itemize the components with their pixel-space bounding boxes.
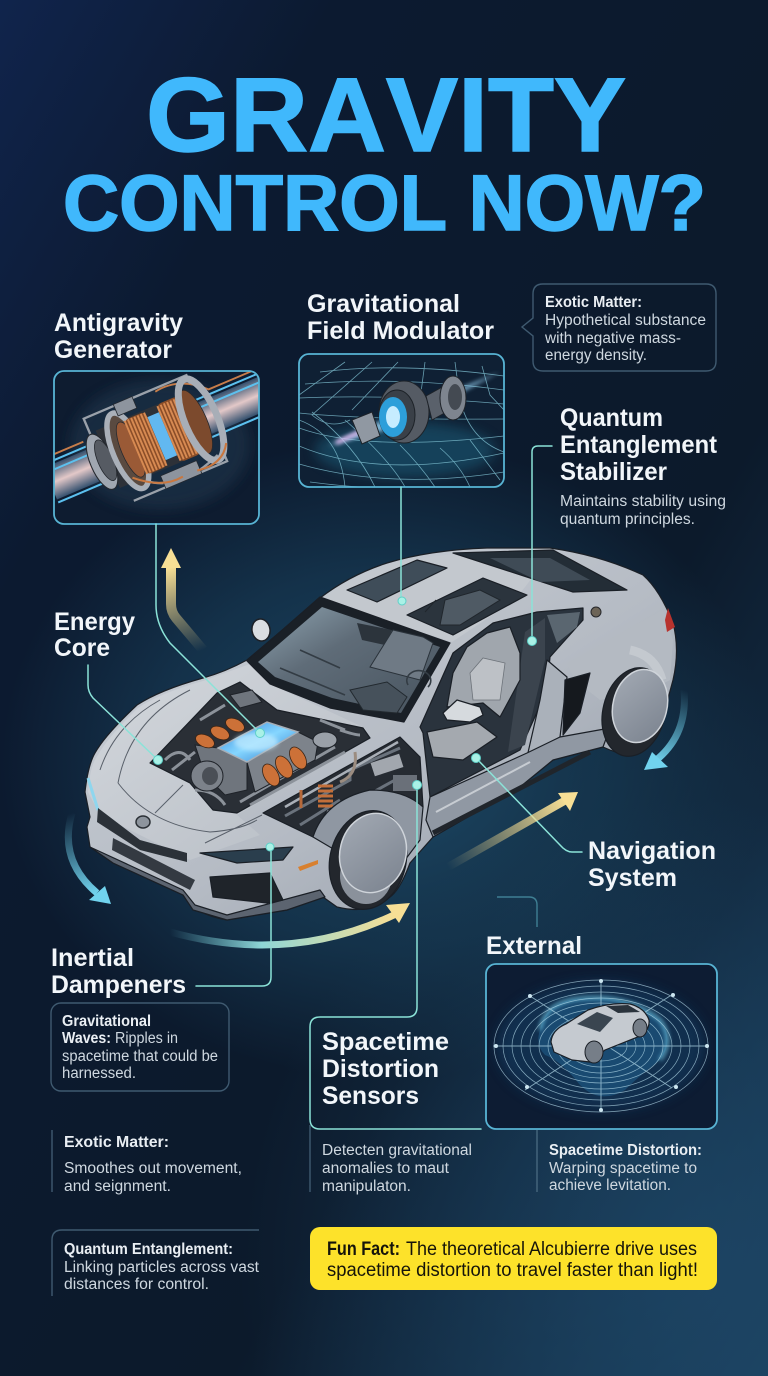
heading: navigation system: System xyxy=(588,864,677,892)
panel: spacetime distortion sensors: Detecten gravitational xyxy=(322,1142,472,1159)
heading: Gravitational Field Modulator: Gravitational xyxy=(307,290,460,318)
arrow: yellow diagonal xyxy=(448,792,578,867)
roof highlights xyxy=(322,552,545,642)
rear tyre xyxy=(593,661,675,763)
text block: quantum entanglement stabilizer: quantum principles. xyxy=(560,511,695,528)
text block: quantum entanglement stabilizer xyxy=(560,404,726,528)
panel: antigravity generator illustration xyxy=(53,370,260,525)
callout: fun fact: spacetime distortion to travel faster than light! xyxy=(327,1260,698,1281)
arrow: bottom sweep xyxy=(170,903,410,945)
side roof window xyxy=(407,578,527,635)
engine machinery xyxy=(165,705,360,805)
car illustration xyxy=(85,548,676,920)
mirror xyxy=(250,618,272,642)
warped grid xyxy=(299,362,504,489)
copper coils xyxy=(125,413,166,474)
arrow: cyan rotation left xyxy=(68,813,111,904)
callout: spacetime distortion note: achieve levitation. xyxy=(549,1177,671,1194)
callout: gravitational waves: spacetime that could be xyxy=(62,1048,218,1065)
chassis cut-away xyxy=(263,737,423,837)
door opening xyxy=(420,608,583,797)
callout: spacetime distortion note: Warping spacetime to xyxy=(549,1160,697,1177)
heading: energy core: Energy xyxy=(54,608,135,636)
front tyre xyxy=(319,802,417,918)
panel: spacetime distortion sensors: Spacetime xyxy=(322,1028,449,1056)
suspension spring xyxy=(318,786,333,806)
leader: external xyxy=(497,897,537,927)
callout: exotic matter definition: with negative mass- xyxy=(544,330,681,347)
arrow: cyan rotation right xyxy=(644,690,684,770)
tail light xyxy=(665,608,675,632)
front fender xyxy=(313,790,423,860)
heading: Gravitational Field Modulator: Field Modulator xyxy=(307,317,494,345)
heading: navigation system xyxy=(588,837,716,892)
seat back xyxy=(447,627,520,717)
text block: inertial dampeners heading: Inertial xyxy=(51,944,134,972)
callout: spacetime distortion note xyxy=(537,1130,702,1194)
callout: quantum entanglement note: distances for control. xyxy=(64,1276,209,1293)
callout: gravitational waves: harnessed. xyxy=(62,1065,136,1082)
title: GRAVITY xyxy=(146,57,626,174)
callout: quantum entanglement note: Linking particles across vast xyxy=(64,1259,260,1276)
heading: energy core xyxy=(54,608,135,662)
callout: fun fact: The theoretical Alcubierre drive uses xyxy=(406,1239,697,1260)
concentric rings xyxy=(493,980,709,1112)
front wheel disc xyxy=(331,806,415,900)
text block: quantum entanglement stabilizer: Quantum xyxy=(560,404,663,432)
leader: quantum stabilizer xyxy=(528,446,552,646)
lower intake xyxy=(210,873,283,903)
callout: exotic matter definition xyxy=(522,284,716,371)
title xyxy=(63,57,706,247)
rear quarter shading xyxy=(567,610,673,700)
badge xyxy=(136,816,150,828)
orange manifold coils xyxy=(193,715,310,789)
callout: exotic matter definition: Hypothetical substance xyxy=(545,312,706,329)
callout: gravitational waves: Gravitational xyxy=(62,1013,151,1030)
callout: quantum entanglement note xyxy=(52,1230,260,1296)
panel: spacetime distortion sensors: anomalies to maut xyxy=(322,1160,450,1177)
door inner panel xyxy=(527,660,567,757)
panel: spacetime distortion sensors: Sensors xyxy=(322,1082,419,1110)
energy beam xyxy=(328,372,500,446)
seat cushion xyxy=(427,722,497,760)
generator tube xyxy=(54,377,258,500)
rear wheel disc xyxy=(605,664,675,748)
leader: navigation xyxy=(472,754,582,852)
fuel cap xyxy=(591,607,601,617)
heading: energy core: Core xyxy=(54,634,110,662)
windshield xyxy=(247,597,450,722)
callout: gravitational waves: Waves: xyxy=(62,1030,111,1047)
text block: inertial dampeners heading xyxy=(51,944,186,999)
panel: spacetime distortion sensors: manipulaton. xyxy=(322,1178,411,1195)
marker lamp xyxy=(298,860,318,871)
title: CONTROL NOW? xyxy=(63,158,706,247)
front grille strip xyxy=(97,808,187,862)
callout: fun fact: Fun Fact: xyxy=(327,1239,400,1260)
callout: gravitational waves xyxy=(51,1003,229,1091)
callout: gravitational waves: Ripples in xyxy=(115,1030,178,1047)
panel: field modulator illustration xyxy=(299,354,504,489)
callout: exotic matter note: and seignment. xyxy=(64,1178,171,1195)
leader: antigravity generator xyxy=(156,524,264,738)
mini car xyxy=(551,1004,649,1062)
text block: quantum entanglement stabilizer: Stabilizer xyxy=(560,458,667,486)
heading: Antigravity Generator: Generator xyxy=(54,336,172,364)
armrest xyxy=(443,700,483,722)
text block: quantum entanglement stabilizer: Maintains stability using xyxy=(560,493,726,510)
heading: external: External xyxy=(486,932,582,960)
front wheel rim xyxy=(340,848,392,904)
callout: exotic matter note xyxy=(52,1130,242,1195)
sunroof xyxy=(347,560,447,602)
callout: fun fact xyxy=(310,1227,717,1290)
callout: exotic matter note: Smoothes out movement, xyxy=(64,1160,242,1177)
nose light xyxy=(88,778,98,810)
heading: Gravitational Field Modulator xyxy=(307,290,494,345)
side vent xyxy=(563,673,590,735)
blue warp blob xyxy=(538,998,668,1096)
callout: exotic matter note: Exotic Matter: xyxy=(64,1134,169,1151)
leader: inertial dampeners xyxy=(196,843,274,986)
hood crease xyxy=(100,690,262,843)
leader: energy core xyxy=(88,665,162,764)
headlight xyxy=(200,847,293,863)
callout: exotic matter definition: Exotic Matter: xyxy=(545,294,642,311)
arrow: yellow lift up xyxy=(161,548,203,650)
panel: spacetime distortion sensors xyxy=(310,780,481,1195)
lower lip xyxy=(112,838,195,890)
car body xyxy=(85,548,676,920)
leader lines xyxy=(88,446,582,986)
callout: exotic matter definition: energy density. xyxy=(545,347,647,364)
heading: navigation system: Navigation xyxy=(588,837,716,865)
sill xyxy=(426,728,610,837)
rear glass xyxy=(453,550,627,592)
panel: external spacetime illustration xyxy=(486,964,717,1129)
engine bay xyxy=(150,682,370,813)
text block: inertial dampeners heading: Dampeners xyxy=(51,971,186,999)
heading: Antigravity Generator xyxy=(54,309,183,364)
heading: Antigravity Generator: Antigravity xyxy=(54,309,183,337)
flange rings xyxy=(86,434,118,490)
panel: spacetime distortion sensors: Distortion xyxy=(322,1055,439,1083)
modulator device xyxy=(352,376,466,444)
callout: spacetime distortion note: Spacetime Distortion: xyxy=(549,1142,702,1159)
energy core xyxy=(218,722,298,762)
hood surface xyxy=(88,664,370,860)
rear side glass xyxy=(547,612,580,643)
callout: quantum entanglement note: Quantum Entanglement: xyxy=(64,1241,233,1258)
text block: quantum entanglement stabilizer: Entanglement xyxy=(560,431,718,459)
leader: field modulator xyxy=(398,487,406,605)
